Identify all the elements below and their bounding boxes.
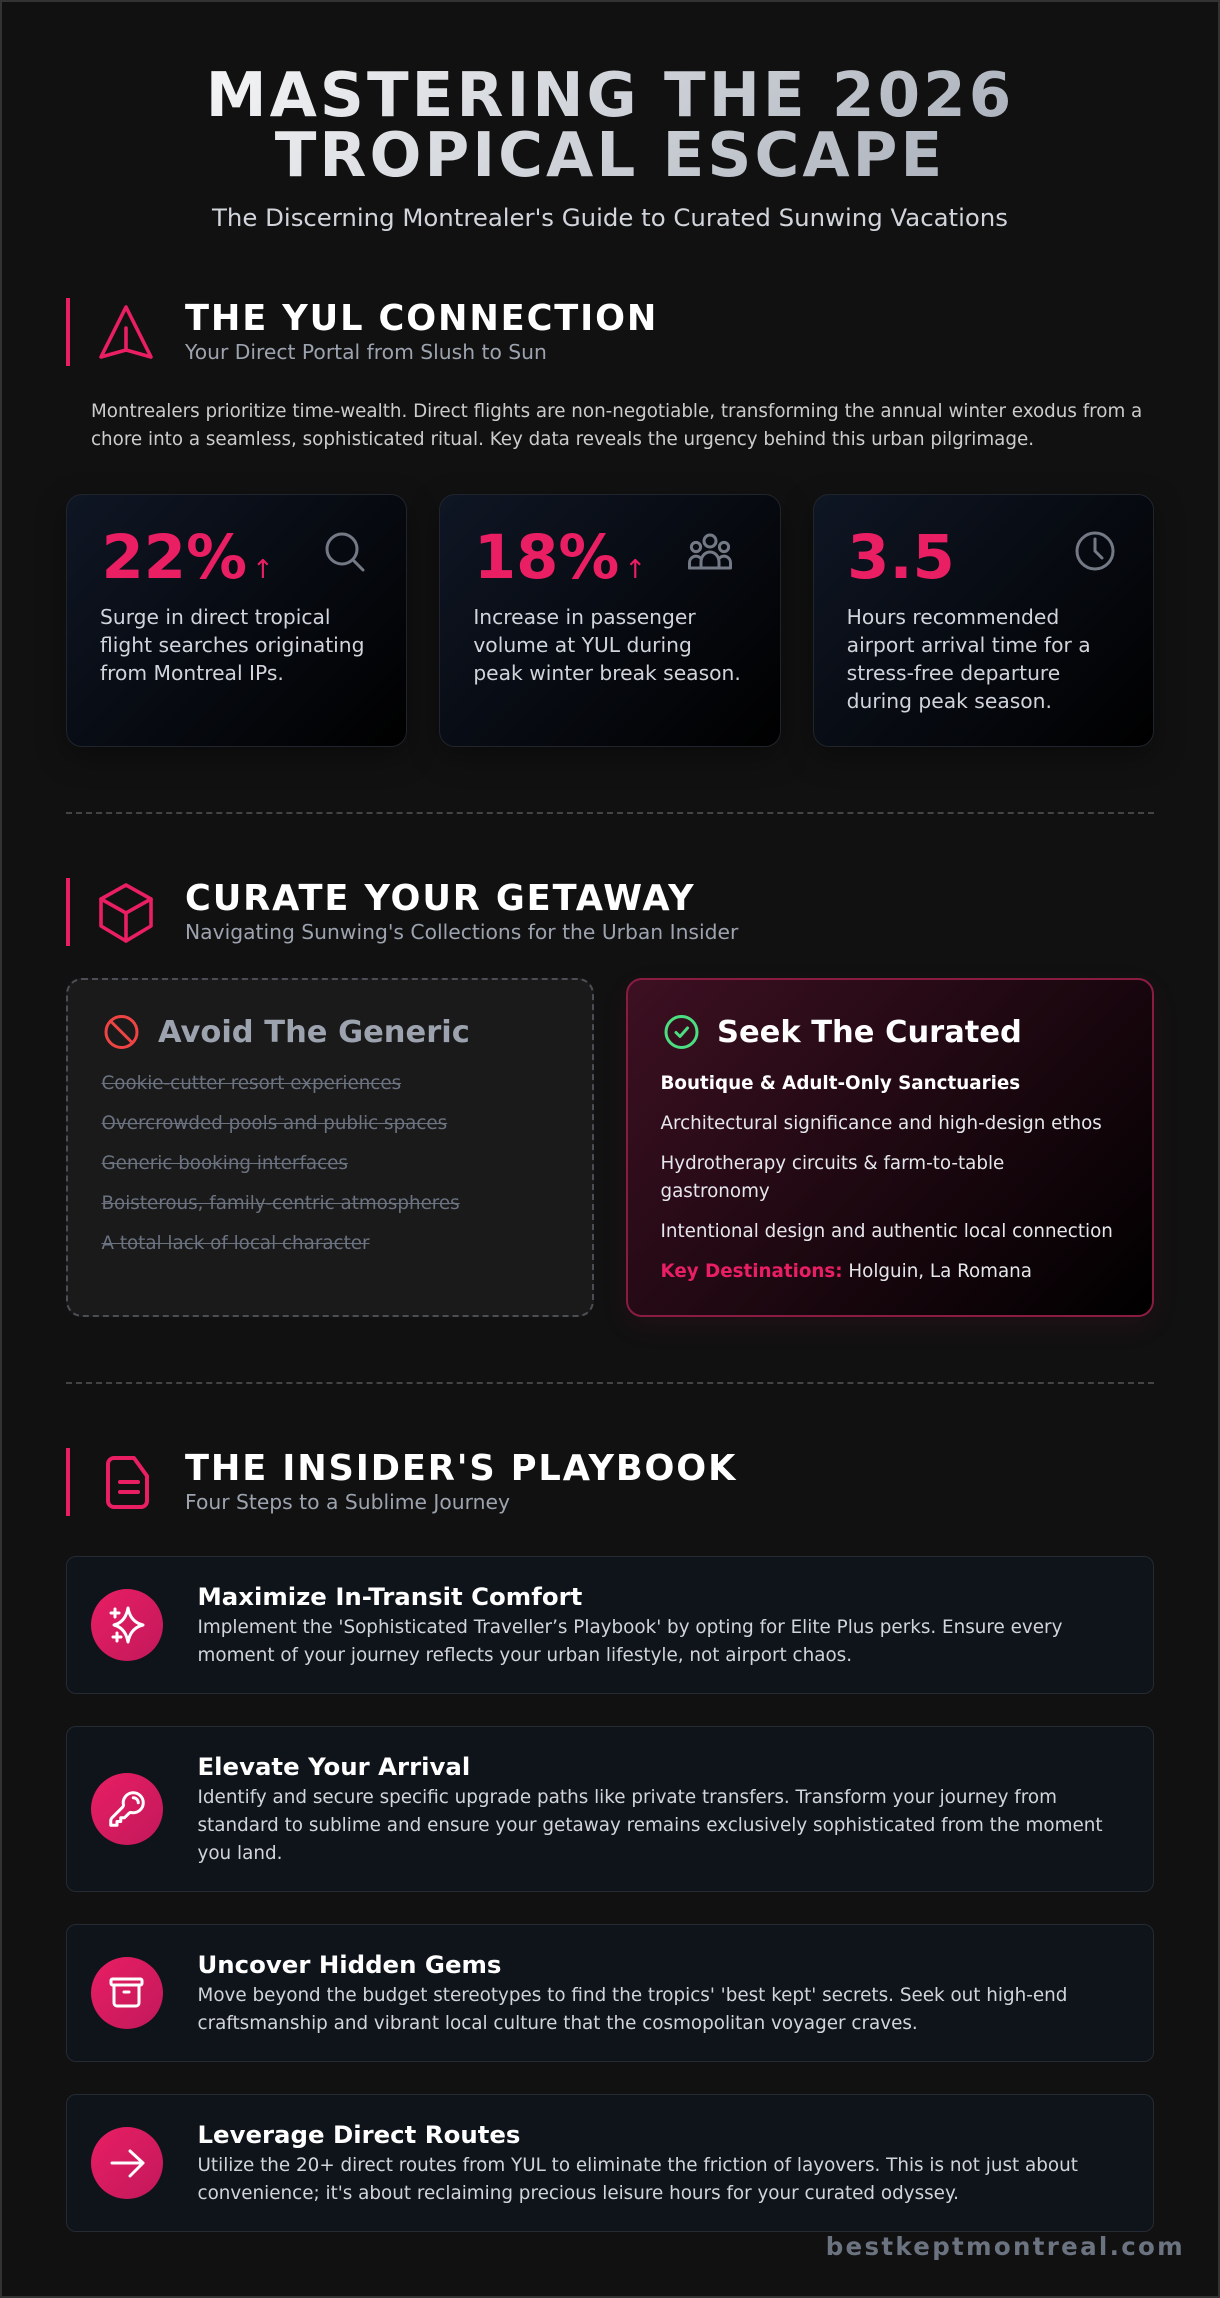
- step text: [198, 1985, 1067, 2034]
- heading: CURATE YOUR GETAWAY: [185, 878, 695, 919]
- step text: Move beyond the budget stereotypes to find the tropics' 'best kept' secrets. Seek out high-end: [198, 1985, 1067, 2006]
- stat label: Hours recommended: [847, 605, 1059, 629]
- key destinations: Key Destinations: Holguin, La Romana: [660, 1261, 1032, 1282]
- stat label: airport arrival time for a: [847, 633, 1091, 657]
- accent bar: [66, 298, 70, 366]
- subheading: Four Steps to a Sublime Journey: [185, 1490, 510, 1514]
- step text: [198, 2155, 1078, 2204]
- stat label: stress-free departure: [847, 661, 1060, 685]
- subtitle: The Discerning Montrealer's Guide to Curated Sunwing Vacations: [212, 202, 1008, 232]
- panel heading: Seek The Curated: [717, 1015, 1022, 1050]
- stat value: 18%↑: [474, 523, 646, 593]
- list item: gastronomy: [660, 1181, 770, 1202]
- list item: A total lack of local character: [102, 1233, 370, 1254]
- list item: [660, 1153, 1004, 1202]
- list item: Intentional design and authentic local connection: [660, 1221, 1113, 1242]
- stat card: 18%: [439, 494, 781, 747]
- title: [66, 66, 1154, 186]
- step text: convenience; it's about reclaiming precious leisure hours for your curated odyssey.: [198, 2183, 959, 2204]
- step text: standard to sublime and ensure your getaway remains exclusively sophisticated from the moment: [198, 1815, 1103, 1836]
- stat label: [473, 605, 741, 685]
- step card: maximize in-transit comfort: [66, 1556, 1154, 1694]
- stat label: Surge in direct tropical: [100, 605, 330, 629]
- icon: cube: [99, 883, 153, 943]
- icon: archive box: [91, 1957, 163, 2029]
- stat label: during peak season.: [847, 689, 1052, 713]
- step card: uncover hidden gems: [66, 1924, 1154, 2062]
- accent bar: [66, 1448, 70, 1516]
- stat label: [847, 605, 1091, 713]
- icon: clock: [1076, 532, 1114, 570]
- step title: Elevate Your Arrival: [198, 1752, 470, 1781]
- header: title and subtitle: [206, 60, 1014, 232]
- stat value: 3.5: [847, 523, 955, 593]
- icon: key: [91, 1773, 163, 1845]
- title: TROPICAL ESCAPE: [275, 120, 945, 191]
- icon: check circle: [664, 1015, 698, 1049]
- list item: Hydrotherapy circuits & farm-to-table: [660, 1153, 1004, 1174]
- stat label: from Montreal IPs.: [100, 661, 284, 685]
- step text: craftsmanship and vibrant local culture that the cosmopolitan voyager craves.: [198, 2013, 918, 2034]
- step card: elevate your arrival: [66, 1726, 1154, 1892]
- icon: document: [106, 1456, 149, 1509]
- step text: [198, 1617, 1062, 1666]
- panel heading: Avoid The Generic: [158, 1015, 470, 1050]
- stat label: volume at YUL during: [473, 633, 692, 657]
- icon: search: [326, 532, 364, 572]
- step text: [198, 1787, 1103, 1864]
- step card: leverage direct routes: [66, 2094, 1154, 2232]
- icon: prohibited: [104, 1015, 138, 1049]
- heading: THE INSIDER'S PLAYBOOK: [185, 1448, 737, 1489]
- intro paragraph: Montrealers prioritize time-wealth. Direct flights are non-negotiable, transforming the annual winter exodus from a: [91, 401, 1142, 422]
- list item: Cookie-cutter resort experiences: [102, 1073, 401, 1094]
- step text: you land.: [198, 1843, 282, 1864]
- step text: Identify and secure specific upgrade paths like private transfers. Transform your journey from: [198, 1787, 1057, 1808]
- section heading: curate your getaway: [66, 878, 738, 946]
- stat label: [100, 605, 364, 685]
- list item: Boisterous, family-centric atmospheres: [102, 1193, 460, 1214]
- subheading: Your Direct Portal from Slush to Sun: [185, 340, 547, 364]
- intro paragraph: chore into a seamless, sophisticated ritual. Key data reveals the urgency behind this urban pilgrimage.: [91, 429, 1034, 450]
- heading: THE YUL CONNECTION: [185, 298, 658, 339]
- stat card: 22%: [66, 494, 407, 747]
- list item: Architectural significance and high-design ethos: [660, 1113, 1102, 1134]
- icon: paper plane: [99, 305, 153, 359]
- step title: Maximize In-Transit Comfort: [198, 1582, 582, 1611]
- step text: moment of your journey reflects your urban lifestyle, not airport chaos.: [198, 1645, 852, 1666]
- panel: avoid the generic: [66, 978, 594, 1317]
- stat value: 22%↑: [102, 523, 274, 593]
- list item: Boutique & Adult-Only Sanctuaries: [660, 1073, 1020, 1094]
- title: MASTERING THE 2026: [206, 60, 1014, 131]
- icon: arrow right: [91, 2127, 163, 2199]
- section heading: the YUL connection: [66, 298, 658, 366]
- intro paragraph: [91, 401, 1142, 450]
- step title: Uncover Hidden Gems: [198, 1950, 501, 1979]
- step title: Leverage Direct Routes: [198, 2120, 520, 2149]
- stat label: flight searches originating: [100, 633, 364, 657]
- stat card: 3.5: [813, 494, 1154, 747]
- subheading: Navigating Sunwing's Collections for the Urban Insider: [185, 920, 738, 944]
- icon: sparkles: [91, 1589, 163, 1661]
- accent bar: [66, 878, 70, 946]
- step text: Utilize the 20+ direct routes from YUL to eliminate the friction of layovers. This is not just about: [198, 2155, 1078, 2176]
- watermark: bestkeptmontreal.com: [826, 2232, 1185, 2261]
- list item: Generic booking interfaces: [102, 1153, 348, 1174]
- list item: Overcrowded pools and public spaces: [102, 1113, 447, 1134]
- step text: Implement the 'Sophisticated Traveller’s Playbook' by opting for Elite Plus perks. Ensure every: [198, 1617, 1062, 1638]
- panel: seek the curated: [626, 978, 1154, 1317]
- stat label: peak winter break season.: [473, 661, 741, 685]
- section heading: the insider's playbook: [66, 1448, 737, 1516]
- stat label: Increase in passenger: [473, 605, 696, 629]
- icon: people: [688, 534, 732, 570]
